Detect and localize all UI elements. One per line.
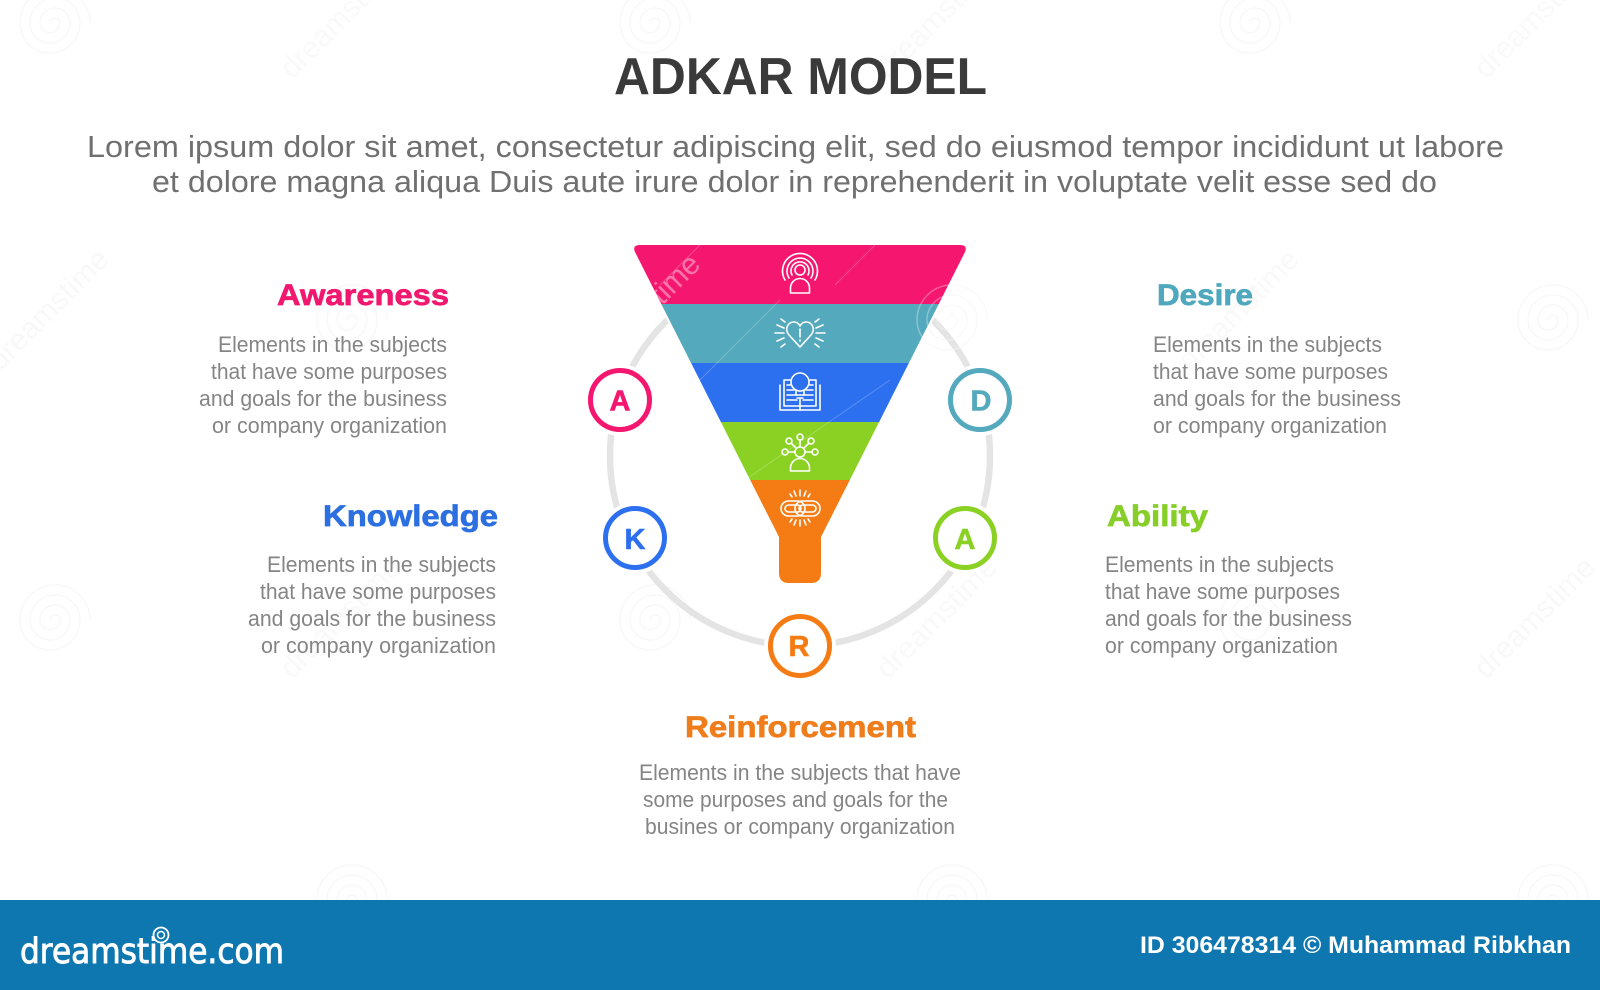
letter circle: A ability: A <box>955 524 976 556</box>
panel: awareness: Awareness <box>277 279 449 312</box>
panel: reinforcement: Reinforcement <box>685 711 916 744</box>
icon: awareness person with signal <box>782 253 818 293</box>
panel: ability: or company organization <box>1105 633 1338 658</box>
icon: knowledge book and bulb <box>780 373 820 410</box>
panel: knowledge: Elements in the subjects <box>267 552 496 577</box>
watermark background: dreamstime <box>1468 551 1600 685</box>
funnel <box>634 245 966 583</box>
letter circle: D desire <box>944 364 1016 436</box>
panel: desire: Desire <box>1157 279 1253 312</box>
footer banner <box>0 900 1600 990</box>
title: ADKAR MODEL <box>614 48 987 106</box>
panel: ability: Ability <box>1107 500 1208 533</box>
panel: awareness: and goals for the business <box>199 386 447 411</box>
subtitle text block <box>87 129 1504 199</box>
panel: knowledge: or company organization <box>261 633 496 658</box>
panel: awareness: that have some purposes <box>211 359 447 384</box>
footer logo: dreamstime.com <box>20 932 284 972</box>
letter circle: A ability <box>929 502 1001 574</box>
letter circle: A awareness: A <box>610 386 631 418</box>
letter circle: K knowledge <box>599 502 671 574</box>
letter circle: D desire: D <box>971 386 991 418</box>
panel: ability <box>1105 500 1352 658</box>
watermark background: dreamstime <box>870 551 1004 685</box>
footer credit: ID 306478314 © Muhammad Ribkhan <box>1140 932 1571 959</box>
icon: ability person with nodes <box>782 434 818 471</box>
subtitle text block: Lorem ipsum dolor sit amet, consectetur adipiscing elit, sed do eiusmod tempor incididunt ut labore <box>87 129 1504 164</box>
watermark overlay on funnel <box>644 245 987 480</box>
panel: knowledge: that have some purposes <box>260 579 496 604</box>
panel: awareness <box>199 279 449 438</box>
watermark background: dreamstime <box>1172 243 1306 377</box>
letter circle: A awareness <box>584 364 656 436</box>
subtitle text block: et dolore magna aliqua Duis aute irure dolor in reprehenderit in voluptate velit esse sed do <box>152 164 1437 199</box>
panel: desire: or company organization <box>1153 413 1387 438</box>
panel: reinforcement <box>639 711 961 839</box>
letter circle: R reinforcement <box>764 610 836 682</box>
panel: desire: and goals for the business <box>1153 386 1401 411</box>
panel: ability: that have some purposes <box>1105 579 1340 604</box>
panel: knowledge: and goals for the business <box>248 606 496 631</box>
panel: desire <box>1153 279 1401 438</box>
panel: desire: Elements in the subjects <box>1153 332 1382 357</box>
panel: ability: and goals for the business <box>1105 606 1352 631</box>
watermark overlay on funnel: time <box>644 248 707 311</box>
icon: reinforcement chain <box>781 490 820 526</box>
icon: desire heart <box>775 319 825 347</box>
panel: knowledge: Knowledge <box>323 500 498 533</box>
panel: reinforcement: Elements in the subjects that have <box>639 760 961 785</box>
watermark background: dreamstime <box>274 551 408 685</box>
panel: reinforcement: busines or company organization <box>645 814 955 839</box>
panel: awareness: Elements in the subjects <box>218 332 447 357</box>
panel: awareness: or company organization <box>212 413 447 438</box>
letter circle: R reinforcement: R <box>789 631 810 663</box>
letter circle: K knowledge: K <box>625 524 646 556</box>
panel: reinforcement: some purposes and goals for the <box>643 787 948 812</box>
panel: desire: that have some purposes <box>1153 359 1388 384</box>
ring behind funnel <box>610 266 990 646</box>
panel: knowledge <box>248 500 498 658</box>
panel: ability: Elements in the subjects <box>1105 552 1334 577</box>
